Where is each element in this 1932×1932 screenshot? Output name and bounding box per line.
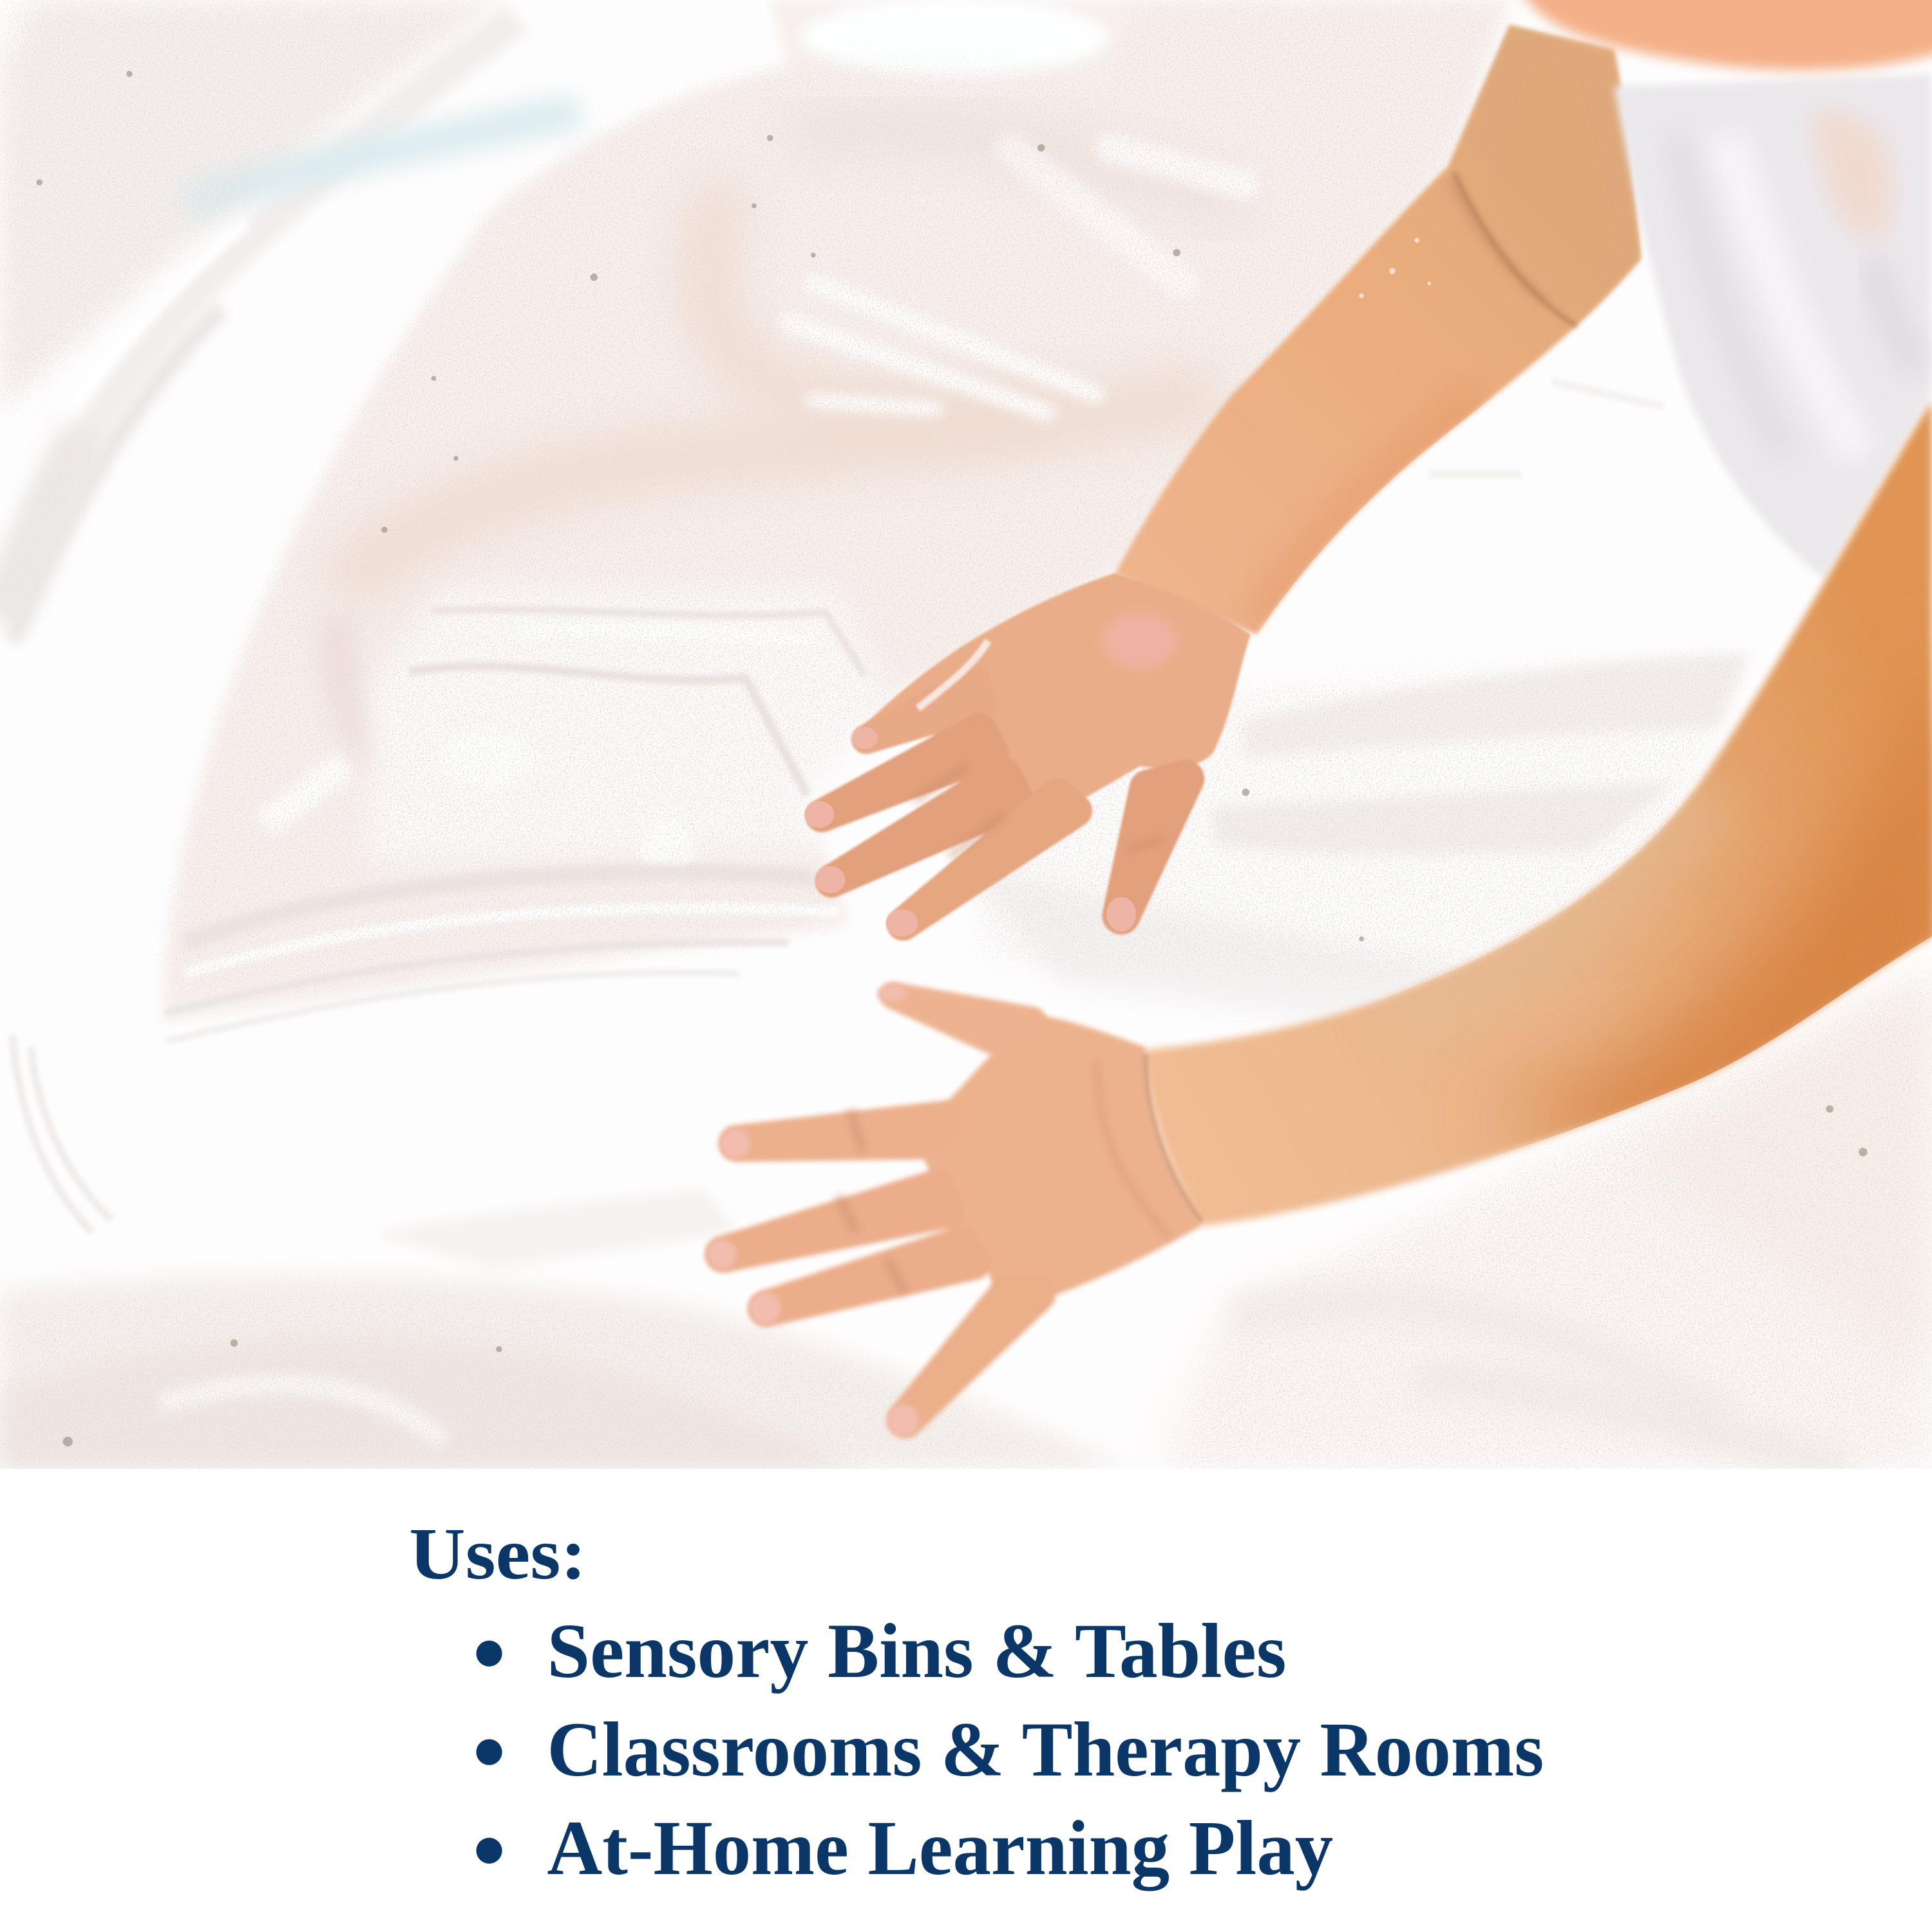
interior chevrons — [370, 591, 887, 862]
blurred head at top right — [1513, 0, 1932, 70]
dark specks in sand — [36, 71, 1868, 1446]
fingernails, lower hand — [707, 985, 919, 1437]
fingers, lower hand — [723, 996, 1037, 1419]
lower arm and hand — [707, 401, 1932, 1437]
sand grain texture — [0, 0, 1932, 1469]
text block: uses — [409, 1513, 1544, 1891]
sand: bottom drift — [0, 973, 1932, 1469]
palm, lower hand — [924, 1013, 1201, 1301]
fingernails, upper hand — [804, 727, 1136, 936]
white shirt sleeve — [1614, 74, 1932, 579]
sand: large pink arch — [163, 0, 1510, 1041]
fan of finger streaks — [788, 148, 1244, 413]
heading: Uses: Uses: — [409, 1513, 587, 1595]
fingers, upper hand — [822, 680, 1186, 924]
list item: sensory bins: Sensory Bins & Tables — [547, 1609, 1286, 1694]
palm, upper hand — [862, 573, 1251, 801]
sand: right side ridges — [961, 382, 1750, 1023]
upper arm and hand — [804, 24, 1651, 936]
sand: top-left drift and grooves — [0, 0, 579, 641]
list item: classrooms: Classrooms & Therapy Rooms — [547, 1707, 1544, 1793]
photo: child's hands drawing in white sand — [0, 0, 1932, 1469]
list item: at-home: At-Home Learning Play — [547, 1806, 1333, 1891]
